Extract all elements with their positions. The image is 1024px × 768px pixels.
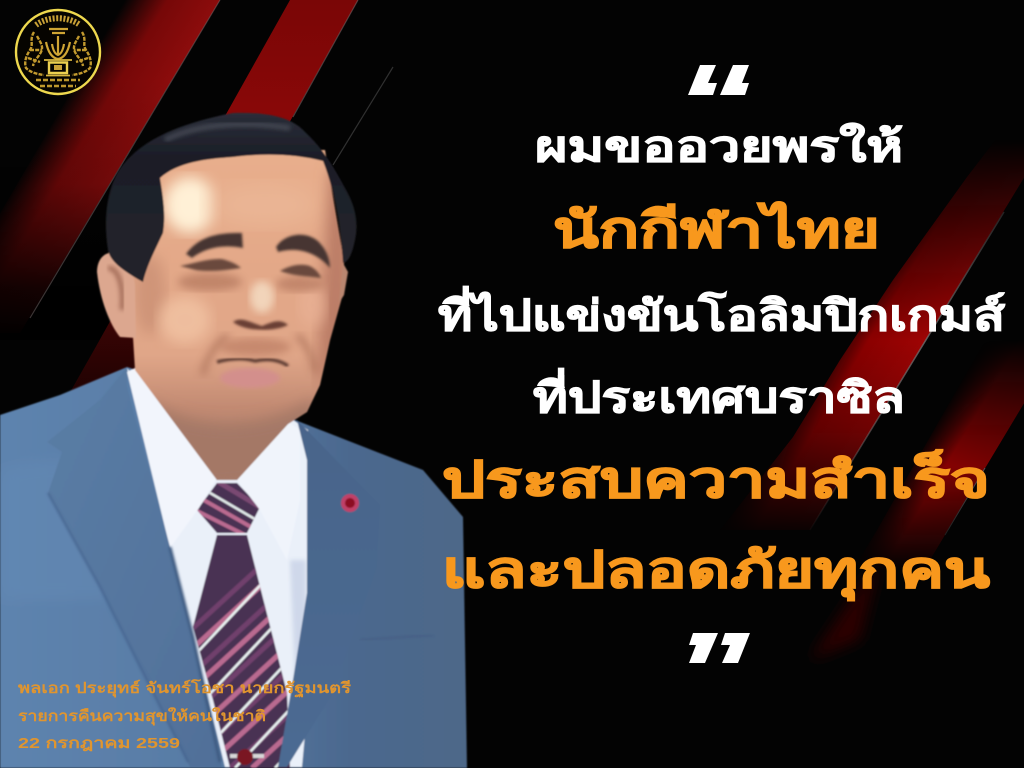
left temple shade — [134, 255, 166, 335]
nostrils — [233, 319, 288, 330]
pocket line — [360, 635, 433, 640]
forehead highlight — [164, 177, 216, 233]
lapel pin — [341, 494, 359, 512]
line: white 1: ผมขออวยพรให้ — [535, 122, 903, 170]
hair — [106, 113, 357, 282]
line: white 3: ที่ประเทศบราซิล — [533, 368, 905, 421]
ear — [97, 253, 136, 338]
suit — [0, 367, 467, 768]
nasolabial shade — [203, 335, 315, 375]
cheek highlight — [159, 296, 211, 344]
line: orange 3: และปลอดภัยทุกคน — [442, 542, 990, 601]
seal: left lion — [25, 32, 44, 75]
eye: left — [180, 259, 241, 271]
quote mark: opening — [688, 65, 749, 95]
tie clip — [230, 749, 264, 765]
red diagonal stripes: upper left — [0, 0, 393, 410]
lapel: right — [278, 420, 380, 767]
seal: right lion — [72, 32, 91, 75]
seal: vase — [46, 29, 70, 59]
hair sheen — [165, 124, 290, 140]
tie blade — [192, 534, 291, 768]
line: orange 2: ประสบความสำเร็จ — [442, 449, 990, 508]
right ear edge — [339, 263, 348, 303]
lapel: left shadow — [48, 493, 188, 762]
caption: date: 22 กรกฎาคม 2559 — [18, 735, 180, 752]
nose highlight — [250, 281, 274, 313]
shirt collar: left — [127, 367, 217, 548]
caption — [18, 678, 352, 752]
shirt shade — [290, 560, 307, 700]
eye socket shade — [178, 273, 242, 291]
right face shade — [312, 172, 344, 381]
ear shade — [108, 268, 122, 310]
neck shade — [162, 399, 312, 470]
mouth line — [217, 359, 288, 366]
neck and face — [128, 150, 350, 490]
upper lip shade — [219, 338, 291, 356]
lapel: left — [47, 367, 222, 767]
eyebrow: right — [276, 235, 330, 268]
caption: name: พลเอก ประยุทธ์ จันทร์โอชา นายกรัฐมนตรี — [18, 678, 352, 698]
line: white 2: ที่ไปแข่งขันโอลิมปิกเกมส์ — [438, 286, 1005, 339]
tie knot — [196, 482, 260, 534]
lower lip — [220, 368, 280, 388]
shirt collar: right — [237, 422, 300, 560]
eye: right — [280, 265, 321, 278]
quote: main text — [438, 122, 1005, 601]
seal: pedestal — [49, 62, 67, 73]
line: orange 1: นักกีฬาไทย — [553, 201, 880, 258]
eyebrow: left — [186, 233, 243, 258]
seal logo — [16, 10, 100, 94]
seal: base — [36, 80, 80, 86]
seal: top arc ornament — [36, 18, 80, 25]
red diagonal stripes: right — [741, 152, 1024, 658]
shirt — [127, 368, 309, 767]
shoulder shading — [0, 450, 140, 600]
person portrait — [0, 113, 467, 768]
caption: programme: รายการคืนความสุขให้คนในชาติ — [18, 707, 266, 726]
quote mark: closing — [689, 633, 750, 663]
